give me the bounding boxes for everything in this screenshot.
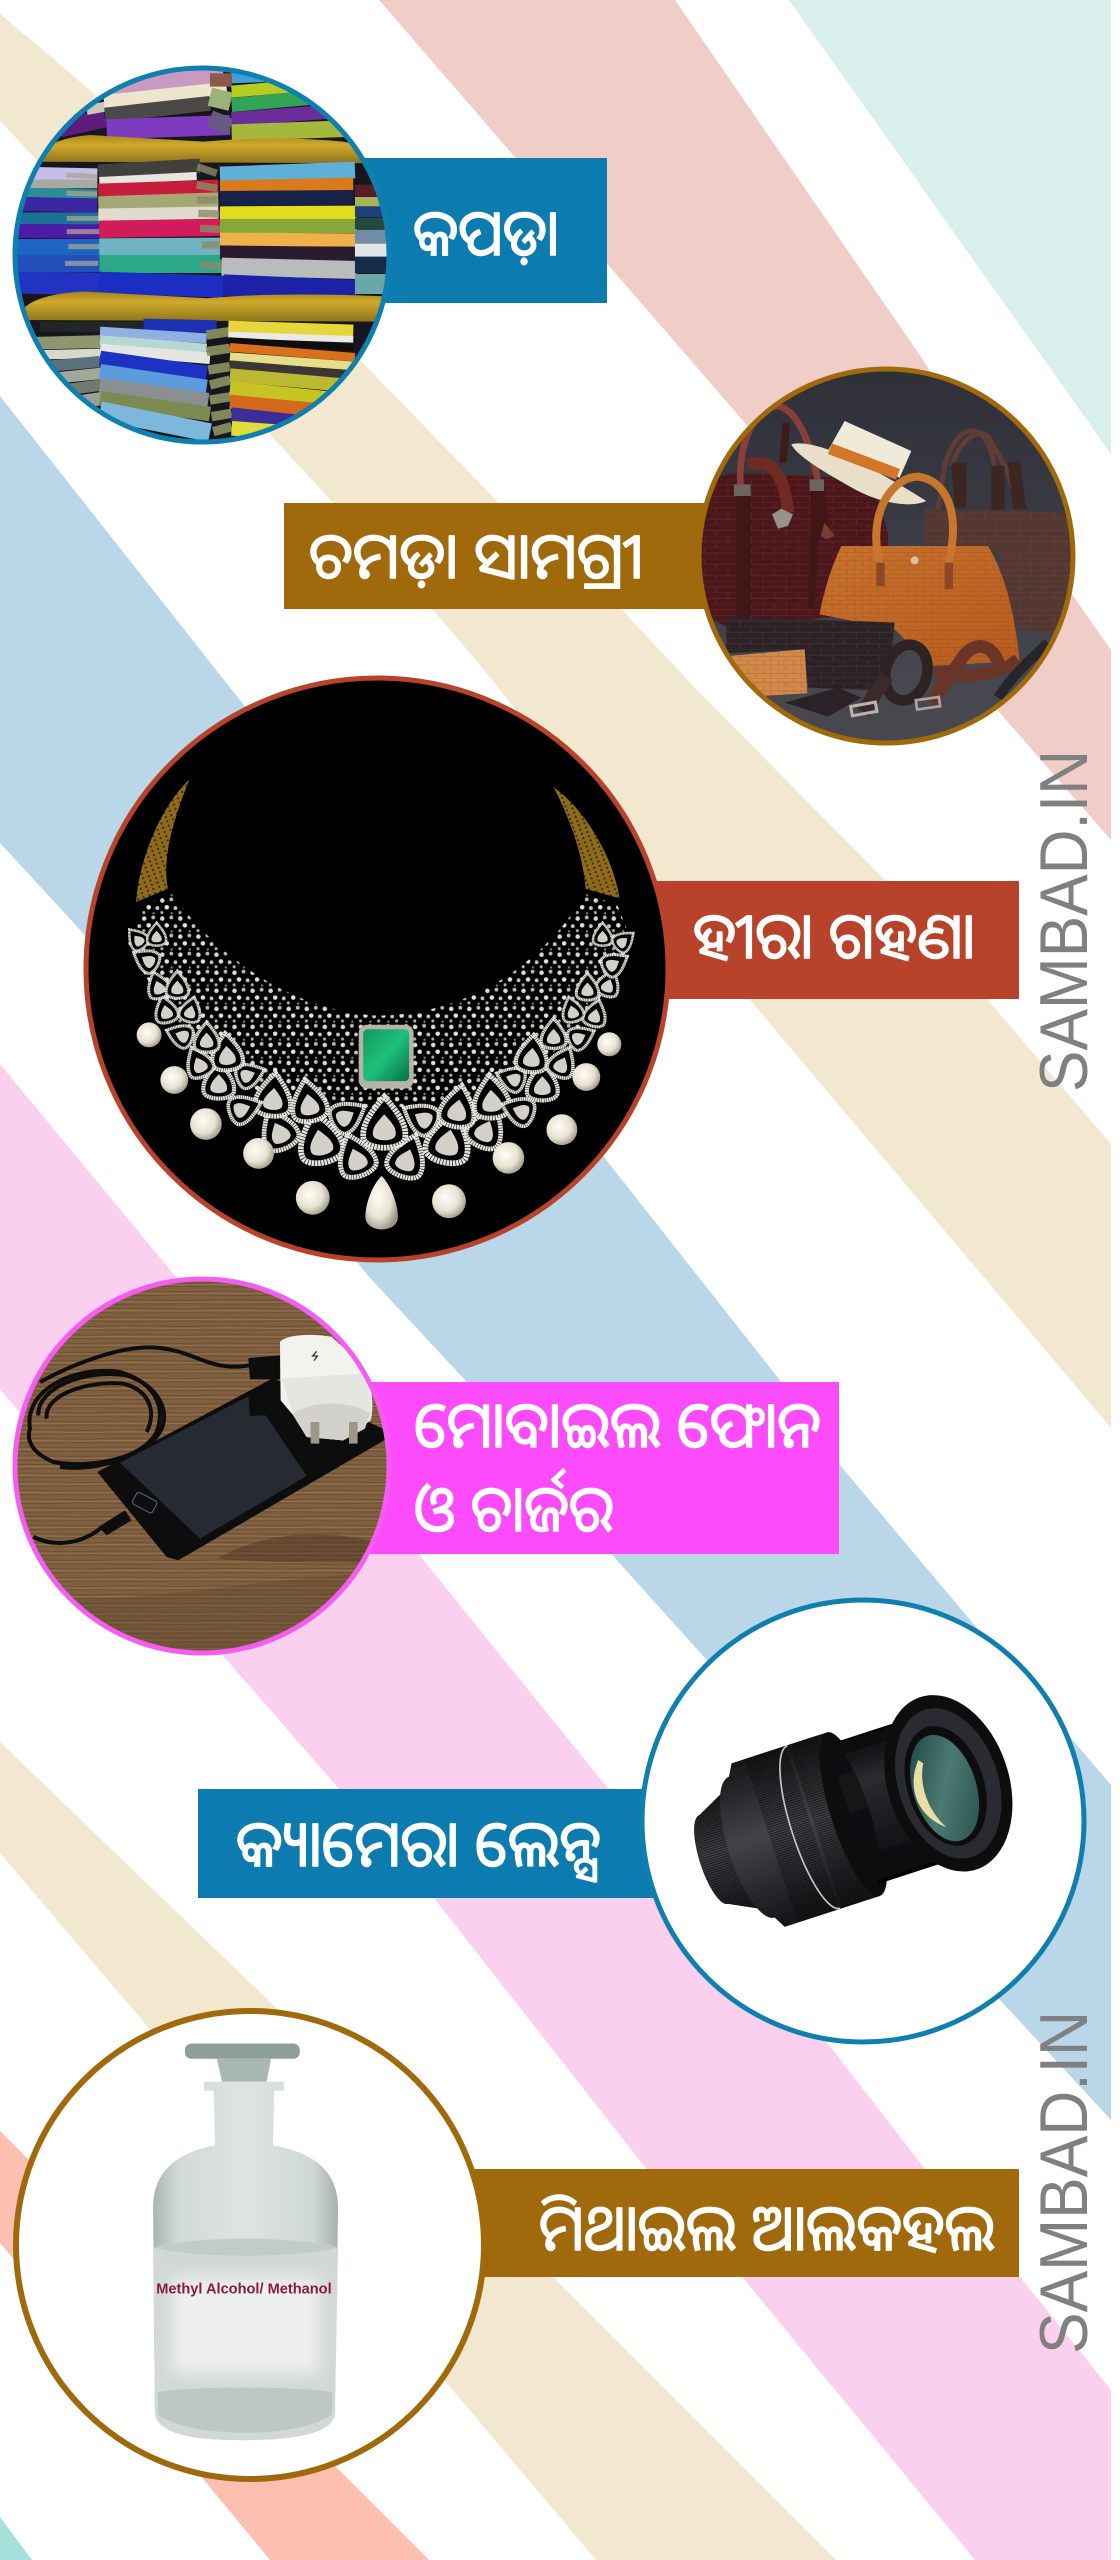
label text: leather: ଚମଡ଼ା ସାମଗ୍ରୀ <box>309 510 643 597</box>
necklace leaf settings <box>122 923 639 1182</box>
label bar: textiles <box>350 158 607 303</box>
photo ring: phone <box>15 1279 389 1653</box>
panel: methyl alcohol <box>16 2011 1019 2479</box>
label text: phone line 2: ଓ ଚାର୍ଜର <box>414 1463 613 1550</box>
photo: white disc and lens <box>642 1600 1084 2042</box>
panel: textiles <box>10 60 607 450</box>
watermark: upper SAMBAD.IN: SAMBAD.IN <box>1026 750 1102 1092</box>
watermark: lower SAMBAD.IN: SAMBAD.IN <box>1026 2011 1102 2354</box>
photo ring: jewellery <box>86 678 668 1260</box>
photo: diamond necklace <box>79 672 685 1278</box>
photo ring: lens <box>642 1600 1084 2042</box>
label bar: methanol <box>470 2169 1019 2277</box>
label bar: jewellery <box>640 881 1019 999</box>
necklace diamond band <box>127 893 633 1109</box>
necklace pearl drops <box>137 1022 621 1229</box>
photo ring: methanol <box>16 2011 484 2479</box>
panel: leather goods <box>284 366 1088 756</box>
necklace emerald centre stone <box>359 1025 414 1089</box>
label bar: leather <box>284 503 724 609</box>
label text: lens: କ୍ୟାମେରା ଲେନ୍ସ <box>236 1798 601 1885</box>
label bar: lens <box>198 1789 660 1898</box>
photo: white disc and bottle: Methyl Alcohol/ Methanol <box>156 2281 332 2297</box>
label text: textiles: କପଡ଼ା <box>413 187 559 274</box>
photo: stacked fabric <box>18 70 386 440</box>
necklace gold mesh <box>136 780 619 902</box>
label text: methanol: ମିଥାଇଲ ଆଲକହଲ <box>539 2182 995 2269</box>
label bar: phone <box>350 1382 839 1554</box>
photo: phone with charger on wood <box>18 1282 386 1650</box>
label text: jewellery: ହୀରା ଗହଣା <box>693 890 975 977</box>
panel: mobile phone and charger <box>10 1272 839 1662</box>
panel: camera lens <box>198 1600 1084 2042</box>
photo ring: leather <box>699 369 1073 743</box>
photo ring: textiles <box>15 68 389 442</box>
photo: leather bags and belts <box>702 372 1070 740</box>
label text: phone line 1: ମୋବାଇଲ ଫୋନ <box>414 1379 821 1466</box>
photo: white disc and bottle <box>16 2011 484 2479</box>
panel: diamond jewellery <box>79 672 1019 1278</box>
